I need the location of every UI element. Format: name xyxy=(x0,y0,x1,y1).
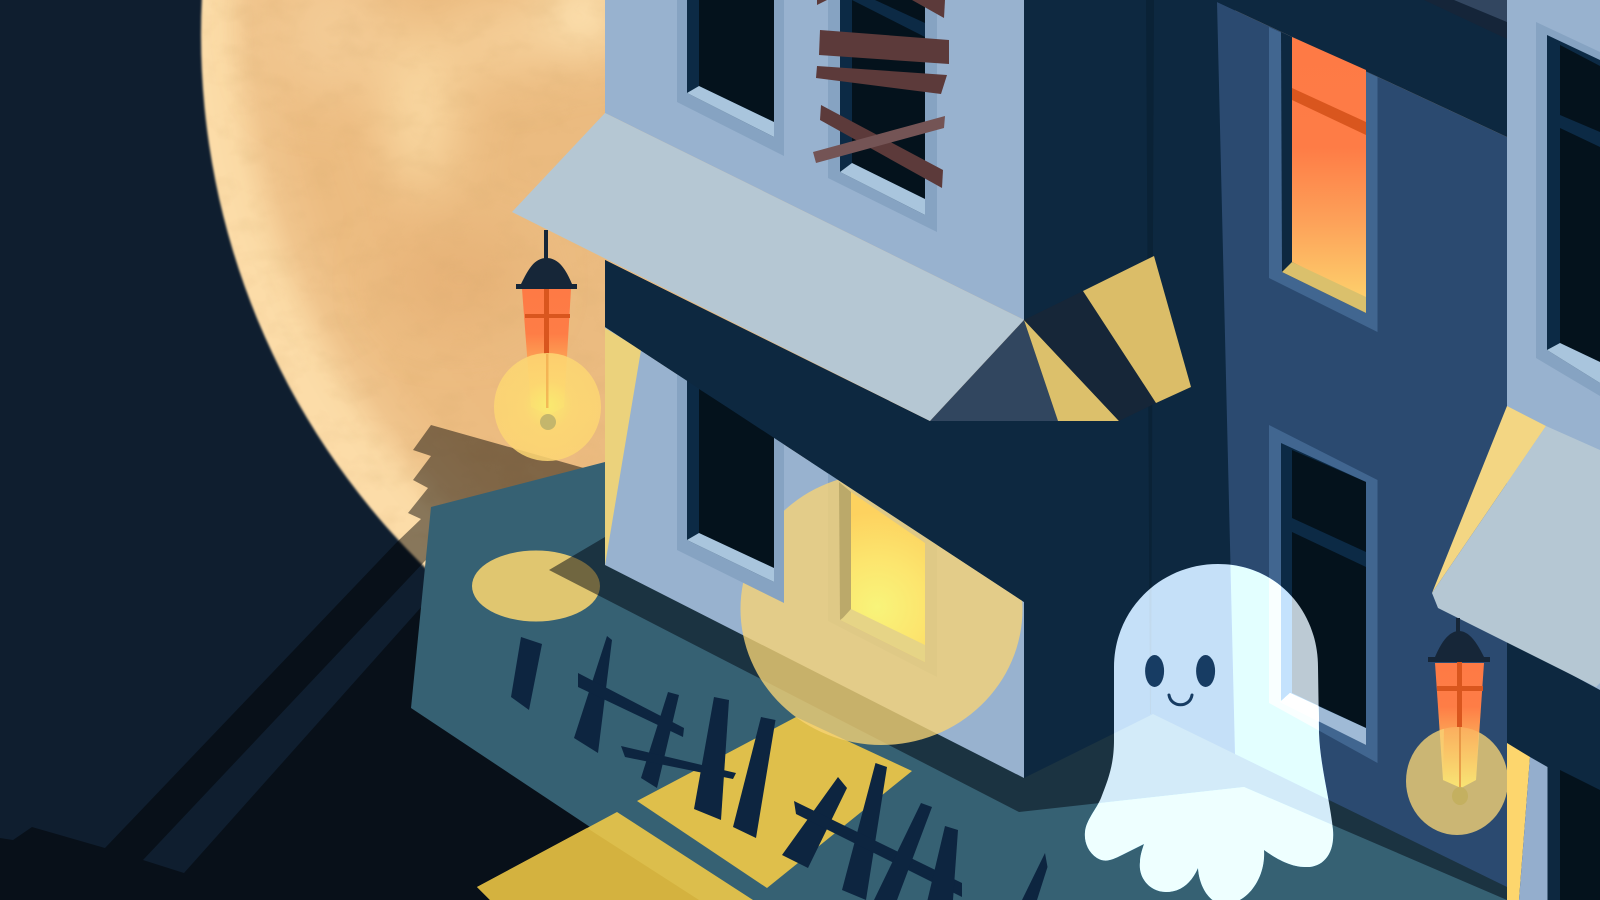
right dark eave xyxy=(1507,640,1600,900)
moon xyxy=(199,0,1507,570)
blue side wall xyxy=(1217,2,1507,887)
lantern glow xyxy=(494,353,601,461)
boards xyxy=(813,0,949,188)
ghost right eye xyxy=(1196,655,1215,687)
wall seam xyxy=(1146,0,1154,714)
left lantern xyxy=(494,230,601,461)
yellow sliver at wall corner xyxy=(605,328,641,565)
lantern glow xyxy=(1406,727,1508,835)
upper right window xyxy=(1536,22,1600,396)
ghost xyxy=(1085,564,1333,900)
main awning xyxy=(512,113,1191,421)
ghost smile xyxy=(1169,695,1192,705)
right front wall xyxy=(1507,0,1600,900)
right lantern xyxy=(1406,618,1508,835)
upper front wall xyxy=(605,0,1024,320)
upper window left xyxy=(677,0,784,156)
right awning xyxy=(1432,406,1600,687)
right yellow sliver and wall fragment xyxy=(1507,743,1600,900)
ghost left eye xyxy=(1145,655,1164,687)
boarded up window xyxy=(813,0,949,232)
lower front wall xyxy=(605,327,1024,778)
lit window outer frame xyxy=(828,472,937,677)
dark lower right window xyxy=(1269,425,1378,763)
orange lit window xyxy=(1269,27,1378,332)
eave underside band xyxy=(605,260,1024,602)
yellow light patches on the path xyxy=(477,717,912,900)
doorway light glow xyxy=(740,473,1022,745)
lower left window xyxy=(677,360,784,603)
dark corner wall xyxy=(605,0,1235,778)
ground and moon-side shadow xyxy=(0,425,605,900)
building shadow on ground xyxy=(549,400,1507,900)
fence xyxy=(511,636,1048,900)
glow pool on pavement xyxy=(472,550,600,622)
lit yellow window xyxy=(839,482,925,662)
dark top band on right wall xyxy=(1217,0,1507,137)
teal pavement xyxy=(411,462,1600,900)
